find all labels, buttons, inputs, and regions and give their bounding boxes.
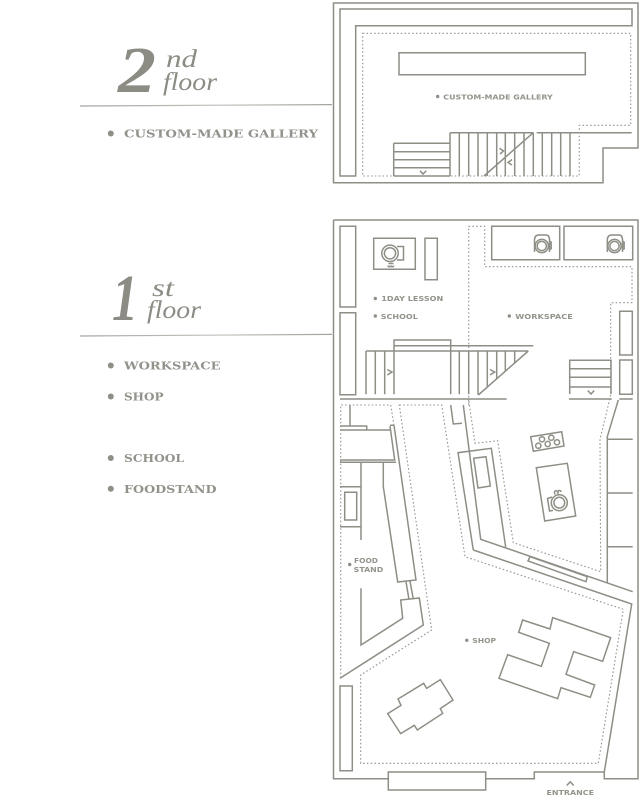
partition wall between workspace and shop (451, 405, 633, 772)
heading: 2nd floor: nd (166, 46, 198, 73)
label: school: SCHOOL (381, 312, 418, 321)
list: 1st floor rooms (108, 358, 221, 496)
list: 1st floor rooms: SCHOOL (124, 451, 184, 465)
label: food stand (348, 556, 383, 574)
entrance label and arrow: ENTRANCE (546, 788, 594, 797)
icon: school sewing machine (382, 245, 404, 267)
heading: 2nd floor: floor (163, 69, 217, 96)
food stand counter and walls (340, 405, 423, 678)
label: workspace: WORKSPACE (515, 312, 573, 321)
partition bench (528, 557, 587, 582)
icon: workspace machine 2 (607, 235, 624, 253)
entrance label and arrow (546, 782, 594, 797)
floor plan: 1st floor (334, 220, 638, 797)
label: food stand: STAND (354, 565, 383, 574)
shop H-shaped table (499, 618, 611, 699)
list: 1st floor rooms: WORKSPACE (123, 358, 221, 372)
food stand shelf (345, 492, 357, 520)
icon: workspace machine 1 (534, 235, 551, 253)
outer wall with entrance (334, 220, 638, 779)
dotted gallery area (363, 33, 631, 176)
label: 1day lesson: 1DAY LESSON (381, 294, 443, 303)
dotted food stand area (341, 405, 394, 678)
right staircase (569, 360, 633, 399)
thread spool tray (531, 432, 564, 451)
partition inset panel (474, 457, 490, 488)
label: custom-made gallery: CUSTOM-MADE GALLERY (443, 92, 553, 101)
list: 2nd floor rooms: CUSTOM-MADE GALLERY (124, 126, 319, 140)
school side table (425, 238, 437, 280)
dotted shop area (361, 405, 623, 763)
list: 1st floor rooms: SHOP (124, 390, 164, 404)
right wall shelves (620, 311, 632, 394)
heading: 1st floor: 1 (112, 262, 138, 335)
central staircase (340, 340, 533, 399)
label: food stand: FOOD (354, 556, 378, 565)
floor plan: 2nd floor (334, 3, 638, 183)
label: shop: SHOP (472, 636, 497, 645)
inner L-shaped wall (340, 9, 632, 176)
heading: 1st floor (112, 262, 201, 335)
heading: 1st floor: floor (147, 297, 201, 324)
staircase (394, 133, 632, 176)
dotted workspace area (469, 226, 632, 572)
heading: 1st floor: st (152, 275, 175, 302)
school machine table (374, 238, 415, 269)
heading: 2nd floor (117, 34, 217, 107)
divider: 1st floor (80, 334, 332, 336)
divider: 2nd floor (80, 105, 332, 106)
left wall shelves (340, 226, 356, 771)
workspace right wall bays (607, 400, 633, 583)
heading: 2nd floor: 2 (117, 34, 156, 107)
icon: workspace centre machine (548, 490, 567, 511)
gallery display table (399, 53, 585, 75)
entrance step (388, 772, 486, 790)
shop small table (388, 680, 453, 734)
list: 1st floor rooms: FOODSTAND (124, 482, 217, 496)
workspace tables (492, 226, 633, 260)
workspace centre table (536, 463, 576, 521)
outer wall (334, 3, 638, 183)
